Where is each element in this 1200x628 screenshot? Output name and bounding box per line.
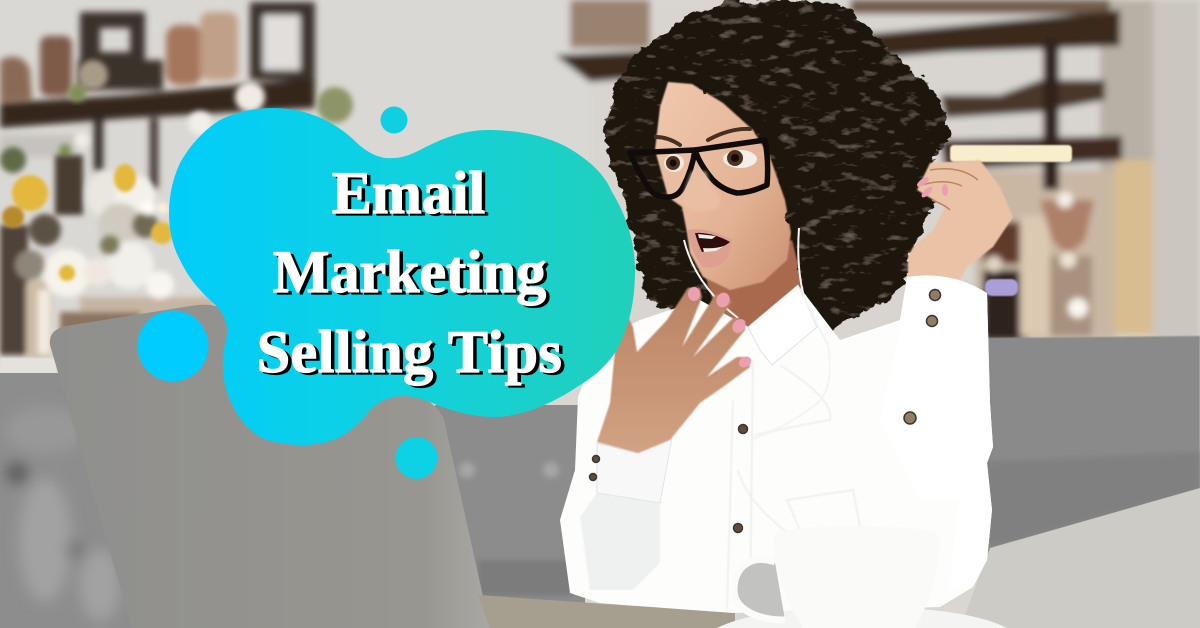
neck (704, 240, 804, 328)
raised hand (908, 160, 1013, 280)
left shelf items (0, 2, 315, 188)
title line: Selling Tips: Selling Tips (260, 321, 566, 387)
decorative circle: bottom (396, 437, 438, 479)
eyebrows (656, 129, 750, 145)
coffee cup (717, 526, 1007, 628)
hair back (603, 0, 950, 338)
title line: Selling Tips: Selling Tips (257, 319, 562, 385)
cup body (773, 526, 940, 628)
nose (682, 172, 720, 211)
buttons (590, 290, 940, 532)
collar (748, 285, 817, 365)
title blob (169, 108, 635, 445)
earphone wire (684, 228, 830, 440)
sofa middle (435, 405, 585, 610)
glasses (630, 140, 768, 197)
eyes (664, 150, 757, 172)
flowers and vases (0, 60, 353, 358)
cup handle (734, 560, 785, 620)
lit strip (950, 145, 1072, 162)
decorative circle: left (138, 310, 208, 382)
laptop (50, 305, 490, 628)
mouth (687, 229, 732, 268)
sofa right (985, 336, 1200, 560)
yellow flowers (2, 164, 173, 281)
decorative circle: top (380, 106, 408, 134)
table (478, 595, 735, 628)
nails (688, 176, 948, 370)
raised hand fingers (922, 169, 978, 210)
shirt body (560, 277, 993, 613)
raised sleeve (880, 275, 993, 590)
title line: Email: Email (335, 162, 489, 228)
hair lock over forehead (680, 60, 835, 290)
purple display (985, 279, 1018, 296)
title line: Marketing: Marketing (273, 239, 546, 305)
wall and right room (0, 0, 1200, 360)
woman (560, 0, 1013, 613)
saucer (717, 607, 1007, 628)
left sleeve cuff (597, 438, 672, 503)
cushion (960, 488, 1200, 628)
sofa left (0, 373, 140, 628)
title line: Email: Email (332, 160, 485, 226)
title text (257, 160, 566, 387)
shirt details (727, 360, 860, 610)
title line: Marketing: Marketing (276, 241, 550, 307)
left window sill (0, 358, 56, 373)
left sleeve (580, 493, 660, 590)
chest hand (597, 288, 750, 453)
face (655, 82, 791, 290)
